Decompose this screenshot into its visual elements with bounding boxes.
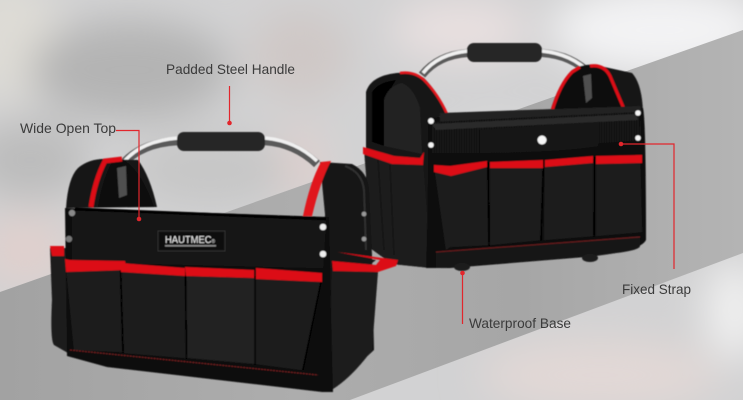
brand label xyxy=(158,231,225,251)
back rim xyxy=(440,106,642,122)
right tool bag xyxy=(363,43,646,271)
rivets left bag xyxy=(66,210,366,257)
side panel xyxy=(366,73,447,268)
front pockets xyxy=(65,259,322,370)
right side pocket xyxy=(328,266,378,392)
left side pocket xyxy=(50,248,68,353)
callout: padded steel handle xyxy=(166,61,295,125)
callout: wide open top: Wide Open Top xyxy=(20,120,116,136)
callout: waterproof base xyxy=(460,271,571,331)
front flap xyxy=(72,211,326,268)
back gusset xyxy=(550,65,643,112)
front pockets xyxy=(434,155,642,250)
back gusset left xyxy=(66,159,157,208)
side panel right xyxy=(320,162,374,392)
webbing strap xyxy=(432,112,641,153)
handle xyxy=(122,132,317,165)
callout: padded steel handle: Padded Steel Handle xyxy=(166,61,295,77)
callout: fixed strap xyxy=(619,142,691,297)
base xyxy=(436,236,640,268)
callout: wide open top xyxy=(20,120,141,221)
front panel xyxy=(65,208,333,392)
brand label: HAUTMEC® xyxy=(165,235,215,246)
left tool bag xyxy=(50,132,398,392)
rivets xyxy=(428,110,641,148)
callout: waterproof base: Waterproof Base xyxy=(469,315,571,331)
side pocket xyxy=(364,150,431,268)
handle xyxy=(422,43,591,75)
front panel xyxy=(426,108,646,268)
callout: fixed strap: Fixed Strap xyxy=(622,281,691,297)
stitching xyxy=(70,350,318,375)
